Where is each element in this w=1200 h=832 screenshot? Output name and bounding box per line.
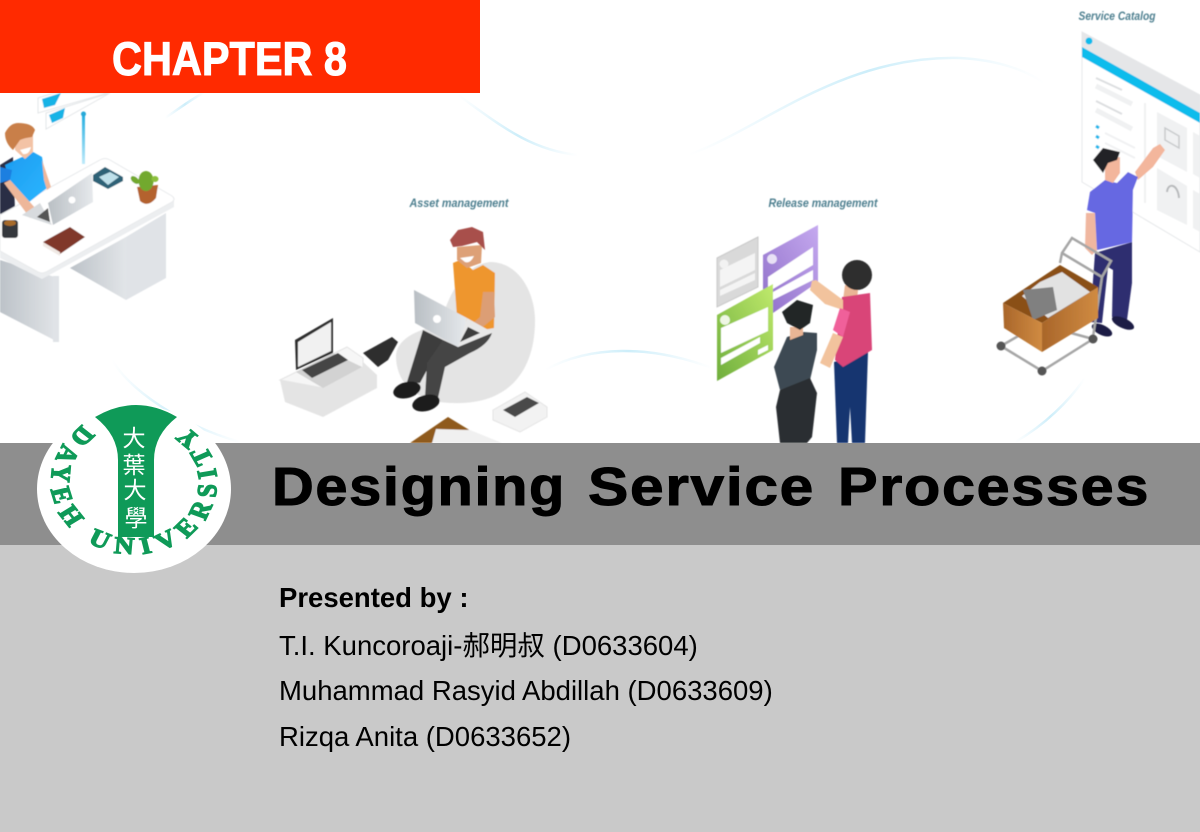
logo text: Chinese name: 大 [122,425,146,451]
decorative connecting waves [112,58,1085,442]
icon: tablet [363,337,398,367]
icon: book [43,227,85,256]
heading: title: Processes [838,457,1150,517]
panel: catalog window [1082,32,1200,252]
illustration: release management [717,196,878,443]
icon: keypad [99,172,119,185]
icon: floating cards [38,93,110,164]
panel: lower grey background [0,545,1200,832]
label: asset management: Asset management [409,196,509,210]
illustration: service catalog [996,9,1200,376]
card: purple [763,225,818,313]
icon: seated person [391,227,495,414]
icon: laptop [22,173,93,225]
text block: presenters [279,582,773,752]
text: presenter 3: Rizqa Anita (D0633652) [279,721,571,752]
logo text: Chinese name: 葉 [122,452,146,478]
icon: bean bag [396,262,535,403]
icon: telephone [93,167,123,189]
illustration: asset management [280,196,547,443]
label: release management: Release management [768,196,878,210]
icon: person [0,123,51,218]
logo text: university name: DAYEH UNIVERSITY [50,424,218,555]
text: presenter 1: T.I. Kuncoroaji-郝明叔 (D0633604) [279,630,698,661]
icon: phone box [493,392,547,432]
text: presenter 2: Muhammad Rasyid Abdillah (D0633609) [279,675,773,706]
label: service catalog: Service Catalog [1078,9,1156,23]
logo text: Chinese name: 大 [124,477,146,503]
icon: desk [0,158,174,342]
text: presented by: Presented by : [279,582,469,613]
banner: chapter [0,0,480,93]
icon: shopping cart [996,238,1111,376]
icon: mug [2,220,18,238]
icon: chair [0,157,15,214]
heading: title: Designing [272,457,566,517]
card: green [717,284,773,381]
panel: title band [0,443,1200,545]
logo text: Chinese name: 學 [124,505,148,531]
logo: Dayeh University [37,405,231,573]
icon: man in pink shirt [810,260,872,443]
illustration: person at desk [0,93,174,342]
card: grey [717,237,758,307]
icon: man in purple shirt [1085,144,1165,339]
heading: title: Service [588,457,815,517]
icon: laptop on lap [414,290,492,347]
icon: cactus [129,171,158,204]
icon: open envelope box [410,417,502,443]
logo text: Chinese name [122,425,148,531]
icon: woman in dark top [774,300,817,443]
heading: chapter 8: CHAPTER 8 [112,32,347,85]
icon: stacked boxes with laptop [280,318,377,417]
heading: title [272,457,1150,517]
